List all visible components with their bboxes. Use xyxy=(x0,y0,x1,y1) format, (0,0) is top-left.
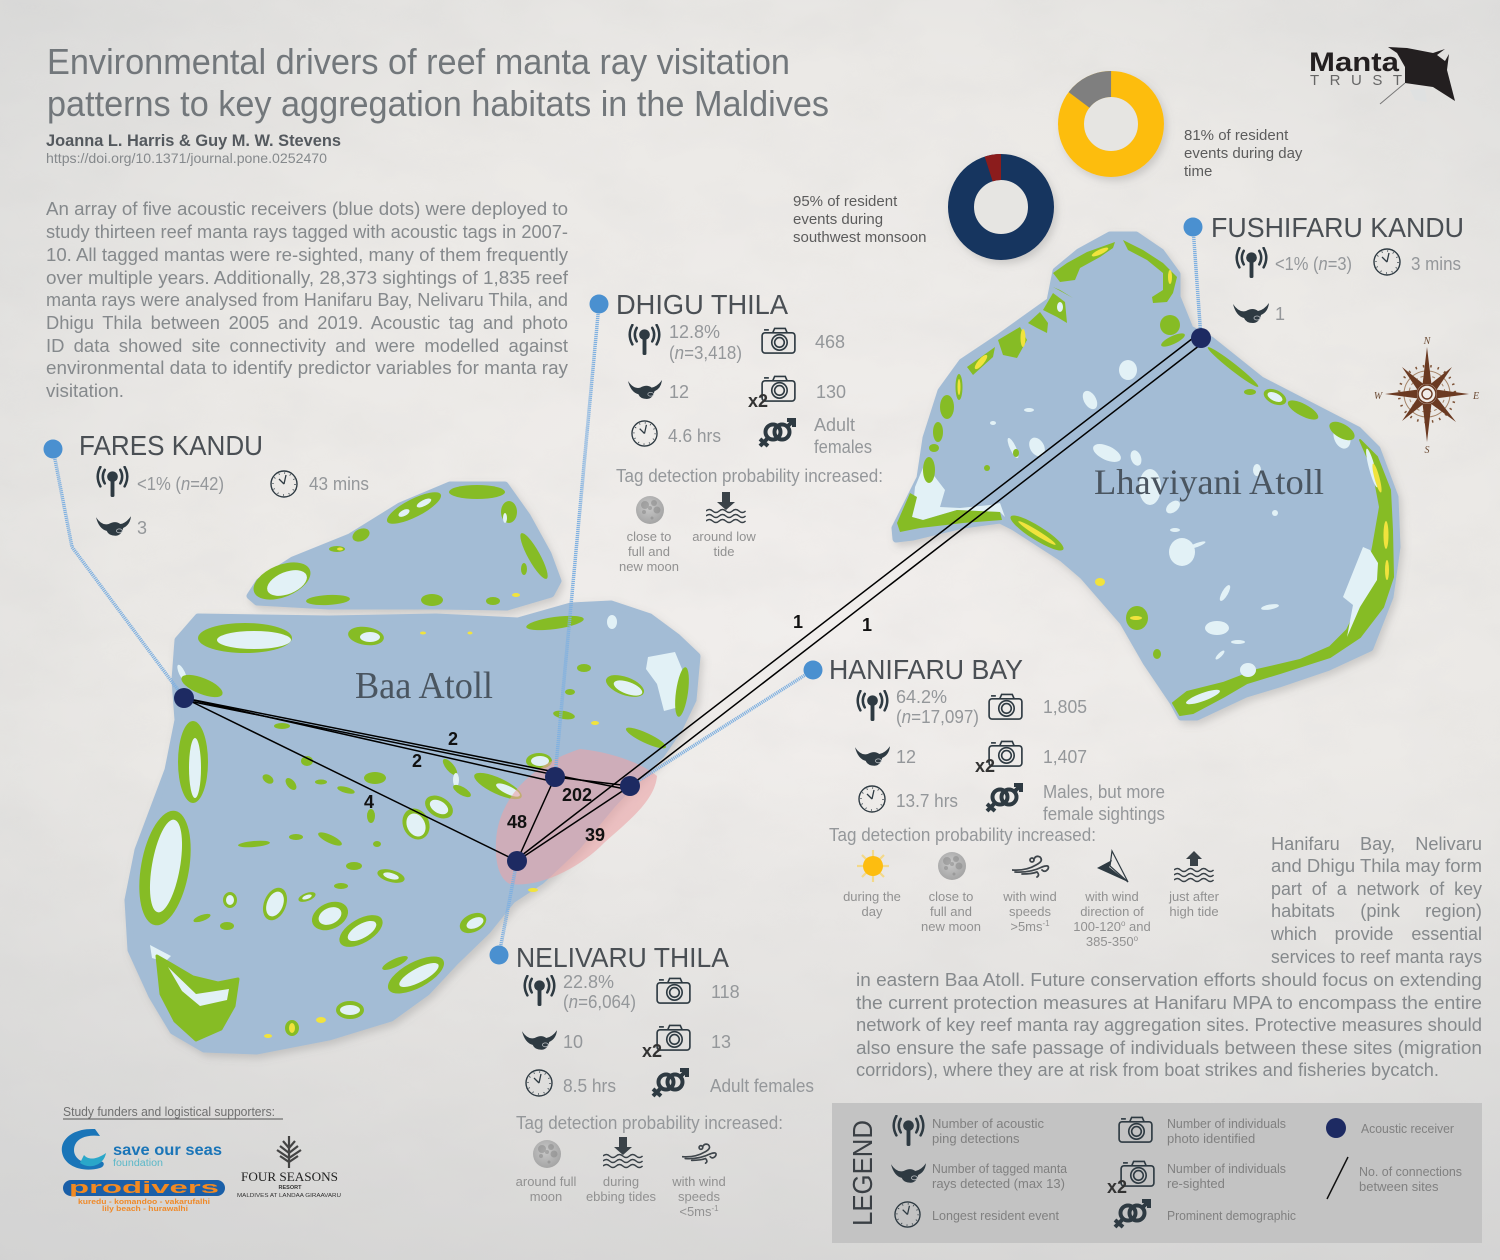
panel: Dhigu Thila: 130 xyxy=(816,382,846,402)
panel: Dhigu Thila xyxy=(590,289,883,574)
panel: Hanifaru Bay: Males, but more xyxy=(1043,782,1165,802)
leader lines from site labels to receivers xyxy=(53,227,1201,955)
donut: 95% southwest monsoon xyxy=(951,157,1051,257)
panel: Hanifaru Bay xyxy=(804,654,1220,949)
panel: Hanifaru Bay: 64.2% xyxy=(896,687,947,707)
panel: Hanifaru Bay: direction of xyxy=(1080,904,1144,919)
panel: legend: photo identified xyxy=(1167,1131,1255,1146)
panel: Hanifaru Bay: HANIFARU BAY xyxy=(829,654,1023,685)
connection counts: 39 xyxy=(585,825,605,845)
panel: Fares Kandu xyxy=(44,430,369,538)
connection counts: 2 xyxy=(412,751,422,771)
panel: Hanifaru Bay: with wind xyxy=(1084,889,1139,904)
panel: Hanifaru Bay: (n=17,097) xyxy=(896,707,979,727)
compass: W xyxy=(1374,391,1384,402)
map: Baa Atoll north lobe xyxy=(248,485,558,607)
panel: legend: re-sighted xyxy=(1167,1176,1225,1191)
panel: legend: x2 xyxy=(1107,1177,1127,1197)
panel: Nelivaru Thila xyxy=(490,942,814,1219)
panel: Dhigu Thila: Tag detection probability increased: xyxy=(616,466,883,486)
conclusion text block: habitats (pink region) xyxy=(1271,901,1482,921)
panel: Dhigu Thila: females xyxy=(814,437,872,457)
panel: Hanifaru Bay: with wind xyxy=(1002,889,1057,904)
panel: legend: between sites xyxy=(1359,1179,1439,1194)
panel: legend: No. of connections xyxy=(1359,1164,1462,1179)
connection counts: 1 xyxy=(862,615,872,635)
panel: Dhigu Thila: full and xyxy=(628,544,670,559)
conclusion text block: services to reef manta rays xyxy=(1271,947,1482,967)
panel: Hanifaru Bay: during the xyxy=(843,889,901,904)
label: Lhaviyani Atoll: Lhaviyani Atoll xyxy=(1094,462,1324,502)
panel: Dhigu Thila: 4.6 hrs xyxy=(668,426,721,446)
intro text block: visitation. xyxy=(46,381,124,401)
panel: Hanifaru Bay: 100-120 xyxy=(1073,919,1121,934)
panel: legend: rays detected (max 13) xyxy=(932,1176,1065,1191)
panel: Dhigu Thila: tide xyxy=(714,544,734,559)
logo: Manta Trust: Manta xyxy=(1309,47,1400,77)
panel: legend: Longest resident event xyxy=(932,1208,1059,1223)
compass: E xyxy=(1472,391,1479,402)
intro text block: ID data showed site connectivity and were modelled against xyxy=(46,336,568,356)
panel: Hanifaru Bay: 1,407 xyxy=(1043,747,1087,767)
compass: S xyxy=(1424,445,1430,456)
intro text block xyxy=(46,199,569,401)
panel: Hanifaru Bay: 385-350 xyxy=(1086,934,1134,949)
conclusion text block: network of key reef manta ray aggregation sites. Protective measures should xyxy=(856,1015,1482,1035)
panel: Fares Kandu: <1% (n=42) xyxy=(137,474,224,494)
icon: sun xyxy=(857,850,889,882)
logo: Four Seasons xyxy=(237,1136,341,1199)
logo: Manta Trust xyxy=(1309,47,1455,104)
map: Lhaviyani Atoll xyxy=(895,235,1397,717)
panel: Hanifaru Bay: and xyxy=(1125,919,1151,934)
donut label: 95% xyxy=(793,193,926,246)
compass xyxy=(1374,336,1479,456)
logo: Save Our Seas: foundation xyxy=(113,1158,163,1169)
intro text block: An array of five acoustic receivers (blue dots) were deployed to xyxy=(46,199,568,219)
panel: Hanifaru Bay: high tide xyxy=(1169,904,1219,919)
panel: Fushifaru Kandu xyxy=(1184,212,1464,324)
logo: Save Our Seas xyxy=(62,1129,222,1170)
panel: Nelivaru Thila: 8.5 hrs xyxy=(563,1076,616,1096)
panel: Nelivaru Thila: 118 xyxy=(711,982,740,1002)
conclusion text block: part of a network of key xyxy=(1271,879,1482,899)
panel: Dhigu Thila: DHIGU THILA xyxy=(616,289,788,320)
label: Baa Atoll: Baa Atoll xyxy=(355,665,493,707)
donut label: 81%: 81% of resident xyxy=(1184,127,1289,144)
intro text block: over multiple years. Additionally, 28,373 sightings of 1,835 reef xyxy=(46,268,569,288)
icon: wind direction xyxy=(1097,851,1128,882)
panel: Hanifaru Bay: -1 xyxy=(1043,919,1050,928)
funders and logos: Study funders and logistical supporters: xyxy=(63,1104,275,1119)
panel: Nelivaru Thila: 13 xyxy=(711,1032,731,1052)
panel: Dhigu Thila: (n=3,418) xyxy=(669,343,742,363)
panel: Dhigu Thila: x2 xyxy=(748,391,768,411)
donut label: 81% xyxy=(1184,127,1303,180)
panel: Dhigu Thila: around low xyxy=(692,529,756,544)
panel: Hanifaru Bay: o xyxy=(1134,934,1139,943)
logo: Four Seasons: MALDIVES AT LANDAA GIRAAVARU xyxy=(237,1193,341,1199)
panel: Nelivaru Thila: (n=6,064) xyxy=(563,992,636,1012)
connection counts: 202 xyxy=(562,785,592,805)
logo: Prodivers: prodivers xyxy=(69,1178,219,1197)
logo: Prodivers: kuredu - komandoo - vakarufalhi xyxy=(78,1197,210,1206)
panel: Hanifaru Bay: x2 xyxy=(975,756,995,776)
intro text block: study thirteen reef manta rays tagged with acoustic tags in 2007- xyxy=(46,222,568,242)
panel: Nelivaru Thila: Tag detection probability increased: xyxy=(516,1113,783,1133)
logo: Manta Trust: TRUST xyxy=(1310,72,1402,89)
panel: Nelivaru Thila: during xyxy=(603,1174,639,1189)
panel: legend: Number of tagged manta xyxy=(932,1161,1068,1176)
panel: Hanifaru Bay: close to xyxy=(929,889,973,904)
donut label: 81%: events during day xyxy=(1184,145,1303,162)
panel: Fushifaru Kandu: 3 mins xyxy=(1411,254,1461,274)
connection counts: 2 xyxy=(448,729,458,749)
authors: Joanna L. Harris & Guy M. W. Stevens xyxy=(46,131,341,150)
panel: legend: LEGEND xyxy=(847,1120,878,1226)
panel: Nelivaru Thila: x2 xyxy=(642,1041,662,1061)
funders and logos xyxy=(62,1104,341,1213)
logo: Four Seasons: RESORT xyxy=(279,1185,302,1191)
panel: Nelivaru Thila: Adult females xyxy=(710,1076,814,1096)
conclusion text block: in eastern Baa Atoll. Future conservation efforts should focus on extending xyxy=(856,970,1482,990)
donut label: 95%: 95% of resident xyxy=(793,193,898,210)
panel: Dhigu Thila: Adult xyxy=(814,415,855,435)
conclusion text block: which provide essential xyxy=(1270,924,1482,944)
conclusion text block: and Dhigu Thila may form xyxy=(1271,856,1482,876)
conclusion text block: corridors), where they are at risk from boat strikes and fisheries bycatch. xyxy=(856,1060,1439,1080)
panel: Nelivaru Thila: -1 xyxy=(712,1204,719,1213)
panel: legend: Number of individuals xyxy=(1167,1116,1286,1131)
panel: Hanifaru Bay: just after xyxy=(1168,889,1220,904)
panel: Nelivaru Thila: 22.8% xyxy=(563,972,614,992)
logo: Save Our Seas: save our seas xyxy=(113,1142,222,1159)
panel: Hanifaru Bay: 13.7 hrs xyxy=(896,791,958,811)
panel: Fares Kandu: 3 xyxy=(137,518,147,538)
logo: Four Seasons: FOUR SEASONS xyxy=(241,1169,338,1184)
title xyxy=(47,41,829,124)
panel: Hanifaru Bay: o xyxy=(1121,919,1126,928)
panel: Nelivaru Thila: speeds xyxy=(678,1189,720,1204)
panel: Dhigu Thila: 12.8% xyxy=(669,322,720,342)
intro text block: manta rays were analysed from Hanifaru Bay, Nelivaru Thila, and xyxy=(46,290,568,310)
pink key habitat region xyxy=(496,749,657,885)
connection counts: 4 xyxy=(364,792,374,812)
panel: Fares Kandu: FARES KANDU xyxy=(79,430,263,461)
panel: Nelivaru Thila: 10 xyxy=(563,1032,583,1052)
title: Environmental drivers of reef manta ray visitation xyxy=(47,41,790,82)
donut label: 81%: time xyxy=(1184,163,1212,180)
intro text block: Dhigu Thila between 2005 and 2019. Acoustic tag and photo xyxy=(46,313,568,333)
doi: https://doi.org/10.1371/journal.pone.0252470 xyxy=(46,150,327,166)
panel: Hanifaru Bay: speeds xyxy=(1009,904,1051,919)
donut label: 95%: events during xyxy=(793,211,883,228)
panel: Dhigu Thila: new moon xyxy=(619,559,679,574)
panel: Nelivaru Thila: moon xyxy=(530,1189,562,1204)
panel: Hanifaru Bay: 1,805 xyxy=(1043,697,1087,717)
donut label: 95%: southwest monsoon xyxy=(793,229,926,246)
panel: Dhigu Thila: close to xyxy=(627,529,671,544)
panel: Fushifaru Kandu: FUSHIFARU KANDU xyxy=(1211,212,1464,243)
conclusion text block: Hanifaru Bay, Nelivaru xyxy=(1271,834,1482,854)
panel: Hanifaru Bay: female sightings xyxy=(1043,804,1165,824)
intro text block: environmental data to identify predictor variables for manta ray xyxy=(46,358,568,378)
panel: legend: Number of individuals xyxy=(1167,1161,1286,1176)
conclusion text block: also ensure the safe passage of individuals between these sites (migration xyxy=(856,1038,1482,1058)
panel: legend: ping detections xyxy=(932,1131,1020,1146)
panel: Hanifaru Bay: day xyxy=(862,904,883,919)
connection counts: 1 xyxy=(793,612,803,632)
conclusion text block xyxy=(856,834,1482,1080)
panel: legend: Acoustic receiver xyxy=(1361,1121,1455,1136)
panel: Dhigu Thila: 468 xyxy=(815,332,845,352)
panel: Nelivaru Thila: ebbing tides xyxy=(586,1189,657,1204)
intro text block: 10. All tagged mantas were re-sighted, many of them frequently xyxy=(46,245,568,265)
connection counts: 48 xyxy=(507,812,527,832)
logo: Prodivers: lily beach - hurawalhi xyxy=(102,1204,188,1213)
donut: 81% day time xyxy=(1055,68,1167,180)
map: Baa Atoll main xyxy=(128,604,697,1051)
panel: Dhigu Thila: 12 xyxy=(669,382,689,402)
panel: Hanifaru Bay: full and xyxy=(930,904,972,919)
panel: Fares Kandu: 43 mins xyxy=(309,474,369,494)
panel: Hanifaru Bay: new moon xyxy=(921,919,981,934)
panel: Fushifaru Kandu: <1% (n=3) xyxy=(1275,254,1352,274)
connection lines between sites xyxy=(184,335,1200,861)
panel: Hanifaru Bay: >5ms xyxy=(1010,919,1043,934)
panel: Nelivaru Thila: <5ms xyxy=(679,1204,712,1219)
panel: Hanifaru Bay: Tag detection probability increased: xyxy=(829,825,1096,845)
panel: Nelivaru Thila: around full xyxy=(516,1174,576,1189)
connection counts xyxy=(364,612,872,845)
panel: Nelivaru Thila: with wind xyxy=(671,1174,726,1189)
panel: Nelivaru Thila: NELIVARU THILA xyxy=(516,942,729,973)
title: patterns to key aggregation habitats in the Maldives xyxy=(47,83,829,124)
panel: Fushifaru Kandu: 1 xyxy=(1275,304,1285,324)
logo: Prodivers xyxy=(63,1178,225,1213)
panel: legend xyxy=(832,1103,1482,1243)
compass: N xyxy=(1423,336,1432,347)
conclusion text block: the current protection measures at Hanifaru MPA to encompass the entire xyxy=(856,993,1482,1013)
panel: legend: Prominent demographic xyxy=(1167,1208,1296,1223)
acoustic receivers xyxy=(174,328,1211,871)
panel: legend: Number of acoustic xyxy=(932,1116,1044,1131)
panel: Hanifaru Bay: 12 xyxy=(896,747,916,767)
